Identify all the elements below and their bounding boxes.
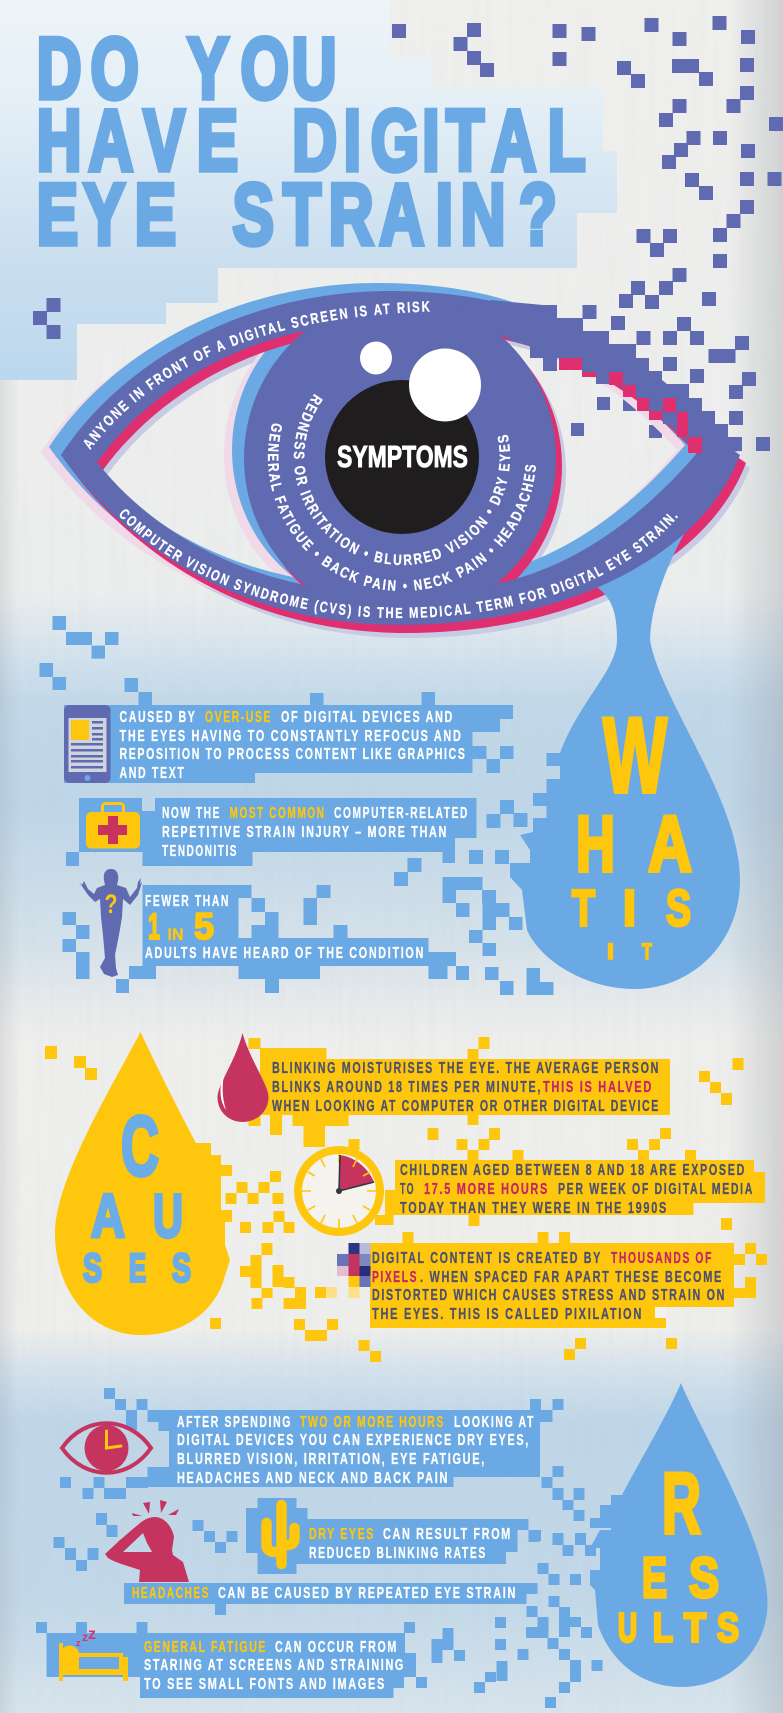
text: pixilation: THOUSANDS OF — [611, 1250, 713, 1267]
tear stream and what is it drop — [510, 505, 740, 989]
pixelated pink lid edge — [559, 358, 702, 453]
text: children exposure: TO — [400, 1181, 415, 1198]
results lettering: L — [653, 1604, 673, 1650]
text: two or more hours: DIGITAL DEVICES YOU CAN EXPERIENCE DRY EYES, — [177, 1432, 530, 1449]
text: blinking: BLINKS AROUND 18 TIMES PER MINUTE, — [272, 1079, 542, 1096]
icon: blood drop — [218, 1033, 268, 1122]
what is it drop lettering: I — [607, 939, 614, 964]
text: general fatigue: STARING AT SCREENS AND STRAINING — [144, 1657, 405, 1674]
title: DIGITAL — [292, 92, 586, 189]
text: most common: TENDONITIS — [162, 843, 238, 860]
icon: cactus — [266, 1505, 294, 1564]
text: dry eyes: REDUCED BLINKING RATES — [309, 1545, 487, 1562]
results lettering: E — [642, 1546, 667, 1610]
text: headaches: HEADACHES — [132, 1585, 210, 1602]
title: STRAIN? — [233, 166, 557, 263]
symptoms label: SYMPTOMS — [337, 439, 468, 474]
text: pixilation — [372, 1250, 726, 1323]
text: most common: MOST COMMON — [230, 805, 326, 822]
text: over-use: REPOSITION TO PROCESS CONTENT LIKE GRAPHICS — [120, 746, 466, 763]
text: over-use: OF DIGITAL DEVICES AND — [281, 709, 454, 726]
icon: pixels — [315, 1243, 370, 1298]
text: headaches: CAN BE CAUSED BY REPEATED EYE STRAIN — [218, 1585, 517, 1602]
what is it drop lettering: I — [623, 880, 636, 936]
results lettering: T — [684, 1604, 706, 1650]
text: two or more hours: AFTER SPENDING — [177, 1414, 292, 1431]
white notch — [655, 1307, 666, 1318]
icon: clock — [294, 1146, 384, 1236]
what is it drop lettering: T — [642, 939, 652, 964]
text: blinking: THIS IS HALVED — [543, 1079, 653, 1096]
icon: bed: z — [82, 1630, 88, 1644]
what is it drop lettering: S — [666, 880, 691, 936]
what is it drop lettering: T — [572, 880, 595, 936]
icon: eye with clock — [62, 1423, 151, 1473]
text: fewer than 1 in 5: 1 — [148, 906, 160, 947]
what is it drop lettering — [572, 695, 692, 964]
causes lettering: E — [129, 1246, 146, 1290]
title: YOU — [187, 20, 336, 117]
text: over-use: CAUSED BY — [120, 709, 196, 726]
text: general fatigue: GENERAL FATIGUE — [144, 1639, 267, 1656]
text: general fatigue: TO SEE SMALL FONTS AND IMAGES — [144, 1676, 386, 1693]
text: two or more hours — [177, 1414, 535, 1487]
icon: headache person — [105, 1500, 189, 1582]
text: fewer than 1 in 5: 5 — [194, 906, 214, 947]
icon: bed: z — [88, 1626, 96, 1643]
text: over-use: AND TEXT — [120, 765, 186, 782]
text: most common — [162, 805, 469, 860]
pixelated purple upper lid — [490, 300, 742, 453]
text: children exposure — [400, 1162, 754, 1217]
causes lettering: U — [153, 1182, 183, 1250]
causes lettering: S — [83, 1246, 102, 1290]
results lettering: S — [717, 1604, 739, 1650]
small highlight — [360, 342, 392, 374]
text: dry eyes: DRY EYES — [309, 1526, 375, 1543]
text: headaches — [132, 1585, 517, 1602]
upper lid text: ANYONE IN FRONT OF A DIGITAL SCREEN IS AT RISK — [84, 301, 430, 450]
icon: bed — [59, 1626, 128, 1681]
text: dry eyes: CAN RESULT FROM — [383, 1526, 512, 1543]
text: over-use: OVER-USE — [205, 709, 272, 726]
text: general fatigue — [144, 1639, 405, 1693]
title: HAVE — [37, 92, 238, 189]
text: children exposure: 17.5 MORE HOURS — [424, 1181, 549, 1198]
title: DO — [37, 20, 139, 117]
panels: causes, yellow blocks — [45, 1037, 767, 1362]
text: blinking — [272, 1060, 660, 1115]
text: over-use: THE EYES HAVING TO CONSTANTLY REFOCUS AND — [120, 728, 462, 745]
symptoms outer ring: GENERAL FATIGUE • BACK PAIN • NECK PAIN • HEADACHES — [268, 424, 536, 591]
text: two or more hours: LOOKING AT — [454, 1414, 535, 1431]
text: most common: REPETITIVE STRAIN INJURY – MORE THAN — [162, 824, 448, 841]
text: pixilation: PIXELS — [372, 1269, 418, 1286]
title — [37, 20, 586, 263]
text: fewer than 1 in 5: ADULTS HAVE HEARD OF THE CONDITION — [145, 945, 425, 962]
panels: results, blue blocks — [36, 1388, 602, 1708]
text: most common: COMPUTER-RELATED — [334, 805, 469, 822]
causes lettering — [83, 1099, 191, 1290]
text: children exposure: TODAY THAN THEY WERE IN THE 1990S — [400, 1200, 668, 1217]
text: two or more hours: HEADACHES AND NECK AND BACK PAIN — [177, 1470, 449, 1487]
results lettering: U — [618, 1604, 637, 1650]
causes lettering: C — [121, 1099, 159, 1193]
results lettering: R — [662, 1456, 701, 1552]
what is it drop lettering: H — [576, 799, 615, 888]
pupil — [325, 380, 479, 534]
title backdrop block — [0, 0, 617, 380]
causes lettering: S — [172, 1246, 191, 1290]
eye — [41, 283, 750, 989]
icon: bed: z — [76, 1638, 81, 1648]
text: pixilation: THE EYES. THIS IS CALLED PIXILATION — [372, 1306, 643, 1323]
text: two or more hours: BLURRED VISION, IRRITATION, EYE FATIGUE, — [177, 1451, 486, 1468]
text: dry eyes — [309, 1526, 512, 1562]
text: pixilation: DIGITAL CONTENT IS CREATED BY — [372, 1250, 602, 1267]
text: over-use — [120, 709, 466, 782]
icon: shrugging person — [79, 869, 142, 977]
large highlight — [409, 348, 481, 422]
results drop — [590, 1383, 768, 1687]
what is it drop lettering: A — [648, 799, 692, 888]
text: two or more hours: TWO OR MORE HOURS — [300, 1414, 445, 1431]
results lettering: S — [689, 1546, 719, 1610]
icon: tablet — [64, 705, 110, 783]
icon: medical kit — [86, 804, 140, 848]
lower lid text: COMPUTER VISION SYNDROME (CVS) IS THE MEDICAL TERM FOR DIGITAL EYE STRAIN. — [120, 509, 678, 619]
what is it drop lettering: W — [603, 695, 667, 815]
panel: what it is, blue blocks — [40, 616, 554, 995]
text: most common: NOW THE — [162, 805, 221, 822]
causes drop — [55, 1032, 232, 1335]
purple pixels dispersing top right — [33, 16, 783, 451]
text: fewer than 1 in 5 — [145, 893, 425, 962]
text: general fatigue: CAN OCCUR FROM — [275, 1639, 398, 1656]
causes lettering: A — [91, 1182, 125, 1250]
symptoms inner ring: REDNESS OR IRRITATION • BLURRED VISION • DRY EYES — [294, 394, 510, 566]
text: fewer than 1 in 5: FEWER THAN — [145, 893, 230, 910]
icon: shrugging person: ? — [104, 889, 118, 919]
title: EYE — [37, 166, 176, 263]
results lettering — [618, 1456, 739, 1650]
text: fewer than 1 in 5: IN — [168, 925, 184, 944]
